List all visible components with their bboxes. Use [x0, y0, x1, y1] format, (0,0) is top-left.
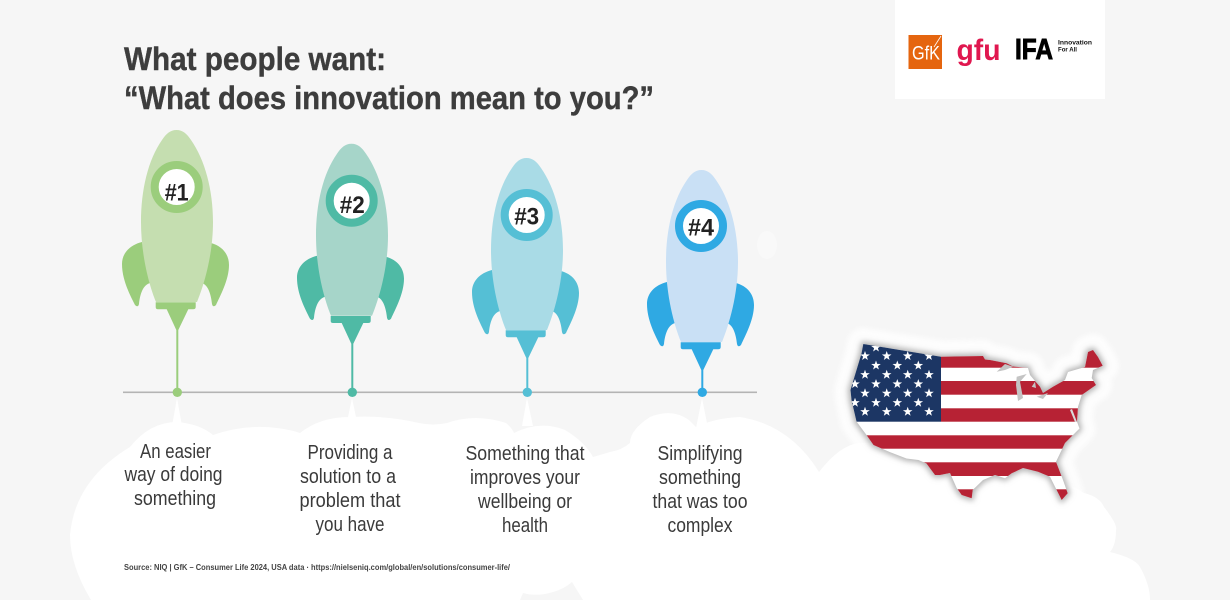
- title: What people want:: [124, 41, 386, 77]
- label 2: you have: [316, 514, 384, 536]
- faint cloud puff: [757, 231, 777, 259]
- cloud band: [70, 398, 1150, 600]
- logo panel: Innovation: [1058, 40, 1092, 46]
- label 2: Providing a: [308, 442, 393, 464]
- source note: Source: NIQ | GfK – Consumer Life 2024, USA data · https://nielseniq.com/global/en/solutions/consumer-life/: [124, 563, 511, 572]
- logo panel: For All: [1058, 46, 1077, 54]
- timeline axis: [123, 392, 757, 393]
- rocket 2: #2: [340, 192, 365, 219]
- label 4: something: [659, 467, 741, 489]
- label 3: improves your: [470, 467, 580, 489]
- rocket 4: #4: [688, 214, 715, 242]
- label 1: something: [134, 488, 216, 510]
- label 3: wellbeing or: [477, 491, 572, 513]
- label 4: complex: [668, 515, 732, 537]
- label 3: Something that: [466, 443, 585, 465]
- rocket 4: [647, 170, 754, 397]
- label 1: [124, 441, 222, 510]
- label 2: solution to a: [300, 466, 397, 488]
- label 1: way of doing: [124, 464, 222, 486]
- rocket 3: #3: [514, 204, 539, 230]
- label 4: that was too: [652, 491, 748, 513]
- title: [124, 41, 654, 116]
- logo panel: [895, 0, 1105, 99]
- USA flag map: [845, 340, 1111, 505]
- rocket 3: [472, 158, 579, 397]
- label 3: [466, 443, 585, 537]
- label 1: An easier: [140, 441, 211, 463]
- rocket 1: #1: [165, 180, 189, 206]
- label 4: Simplifying: [658, 443, 742, 465]
- logo panel: gfu: [956, 34, 1000, 67]
- cloud gap at bottom: [520, 582, 583, 600]
- title: “What does innovation mean to you?”: [124, 80, 654, 116]
- label 4: [652, 443, 748, 537]
- label 2: [300, 442, 401, 536]
- label 2: problem that: [300, 490, 401, 512]
- label 3: health: [502, 515, 548, 537]
- rocket 2: [297, 144, 404, 397]
- logo panel: IFA: [1015, 34, 1053, 66]
- logo panel: GfK: [912, 44, 940, 64]
- rocket 1: [122, 130, 229, 397]
